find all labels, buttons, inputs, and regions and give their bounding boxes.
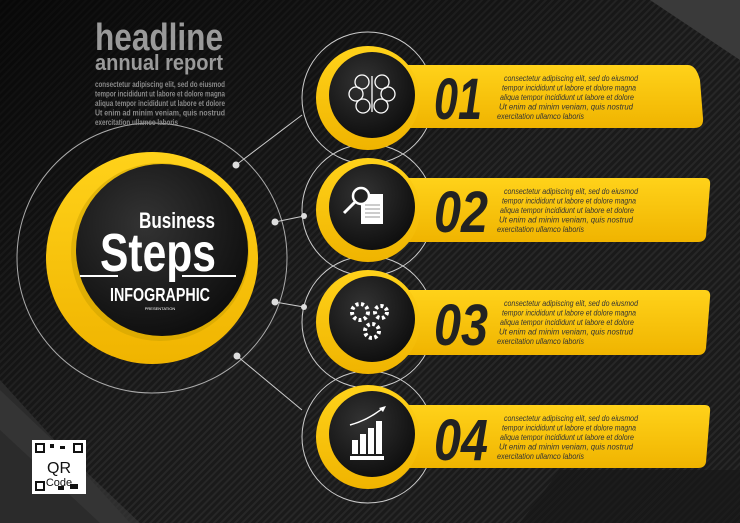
step texts: Ut enim ad minim veniam, quis nostrud <box>499 328 634 336</box>
step texts: tempor incididunt ut labore et dolore magna <box>502 196 636 206</box>
step texts: exercitation ullamco laboris <box>497 337 584 346</box>
step texts: tempor incididunt ut labore et dolore magna <box>502 308 636 318</box>
main circle: Steps <box>100 223 216 283</box>
step texts: aliqua tempor incididunt ut labore et dolore <box>500 93 634 102</box>
numbers: 04 <box>434 408 488 473</box>
intro text: aliqua tempor incididunt ut labore et dolore <box>95 99 225 108</box>
step texts: exercitation ullamco laboris <box>497 225 584 234</box>
numbers: 01 <box>434 67 482 132</box>
intro text: exercitation ullamco laboris <box>95 118 178 127</box>
step texts: Ut enim ad minim veniam, quis nostrud <box>499 216 634 224</box>
intro text <box>95 80 225 127</box>
step texts <box>497 74 638 461</box>
icon: brain <box>349 75 395 113</box>
step texts: aliqua tempor incididunt ut labore et dolore <box>500 318 634 327</box>
step texts: consectetur adipiscing elit, sed do eiusmod <box>504 299 638 308</box>
QR code <box>32 440 86 494</box>
icon: gears <box>352 304 387 338</box>
icon: growth chart <box>350 406 386 460</box>
numbers: 02 <box>434 180 488 245</box>
step texts: aliqua tempor incididunt ut labore et dolore <box>500 433 634 442</box>
step texts: exercitation ullamco laboris <box>497 112 584 121</box>
numbers <box>434 67 488 473</box>
step texts: consectetur adipiscing elit, sed do eiusmod <box>504 187 638 196</box>
main circle: PRESENTATION <box>145 306 175 311</box>
icon: document search <box>344 188 383 224</box>
QR code: Code <box>46 477 72 489</box>
step texts: tempor incididunt ut labore et dolore magna <box>502 424 636 432</box>
step texts: Ut enim ad minim veniam, quis nostrud <box>499 102 634 112</box>
intro text: tempor incididunt ut labore et dolore magna <box>95 90 225 98</box>
step texts: consectetur adipiscing elit, sed do eiusmod <box>504 74 638 83</box>
step texts: aliqua tempor incididunt ut labore et dolore <box>500 206 634 215</box>
step texts: Ut enim ad minim veniam, quis nostrud <box>499 442 634 452</box>
QR code: QR <box>47 460 71 477</box>
step texts: consectetur adipiscing elit, sed do eiusmod <box>504 414 638 423</box>
banners <box>395 65 710 468</box>
connector lines <box>17 32 434 503</box>
numbers: 03 <box>434 293 488 358</box>
intro text: Ut enim ad minim veniam, quis nostrud <box>95 108 225 118</box>
main circle <box>46 152 258 364</box>
title <box>95 17 224 75</box>
step texts: exercitation ullamco laboris <box>497 452 584 461</box>
intro text: consectetur adipiscing elit, sed do eiusmod <box>95 80 225 89</box>
main circle: INFOGRAPHIC <box>110 285 210 305</box>
step texts: tempor incididunt ut labore et dolore magna <box>502 84 636 92</box>
step circles <box>316 46 420 489</box>
title: headline <box>95 17 223 59</box>
title: annual report <box>95 50 224 75</box>
main circle: Business <box>139 208 215 233</box>
